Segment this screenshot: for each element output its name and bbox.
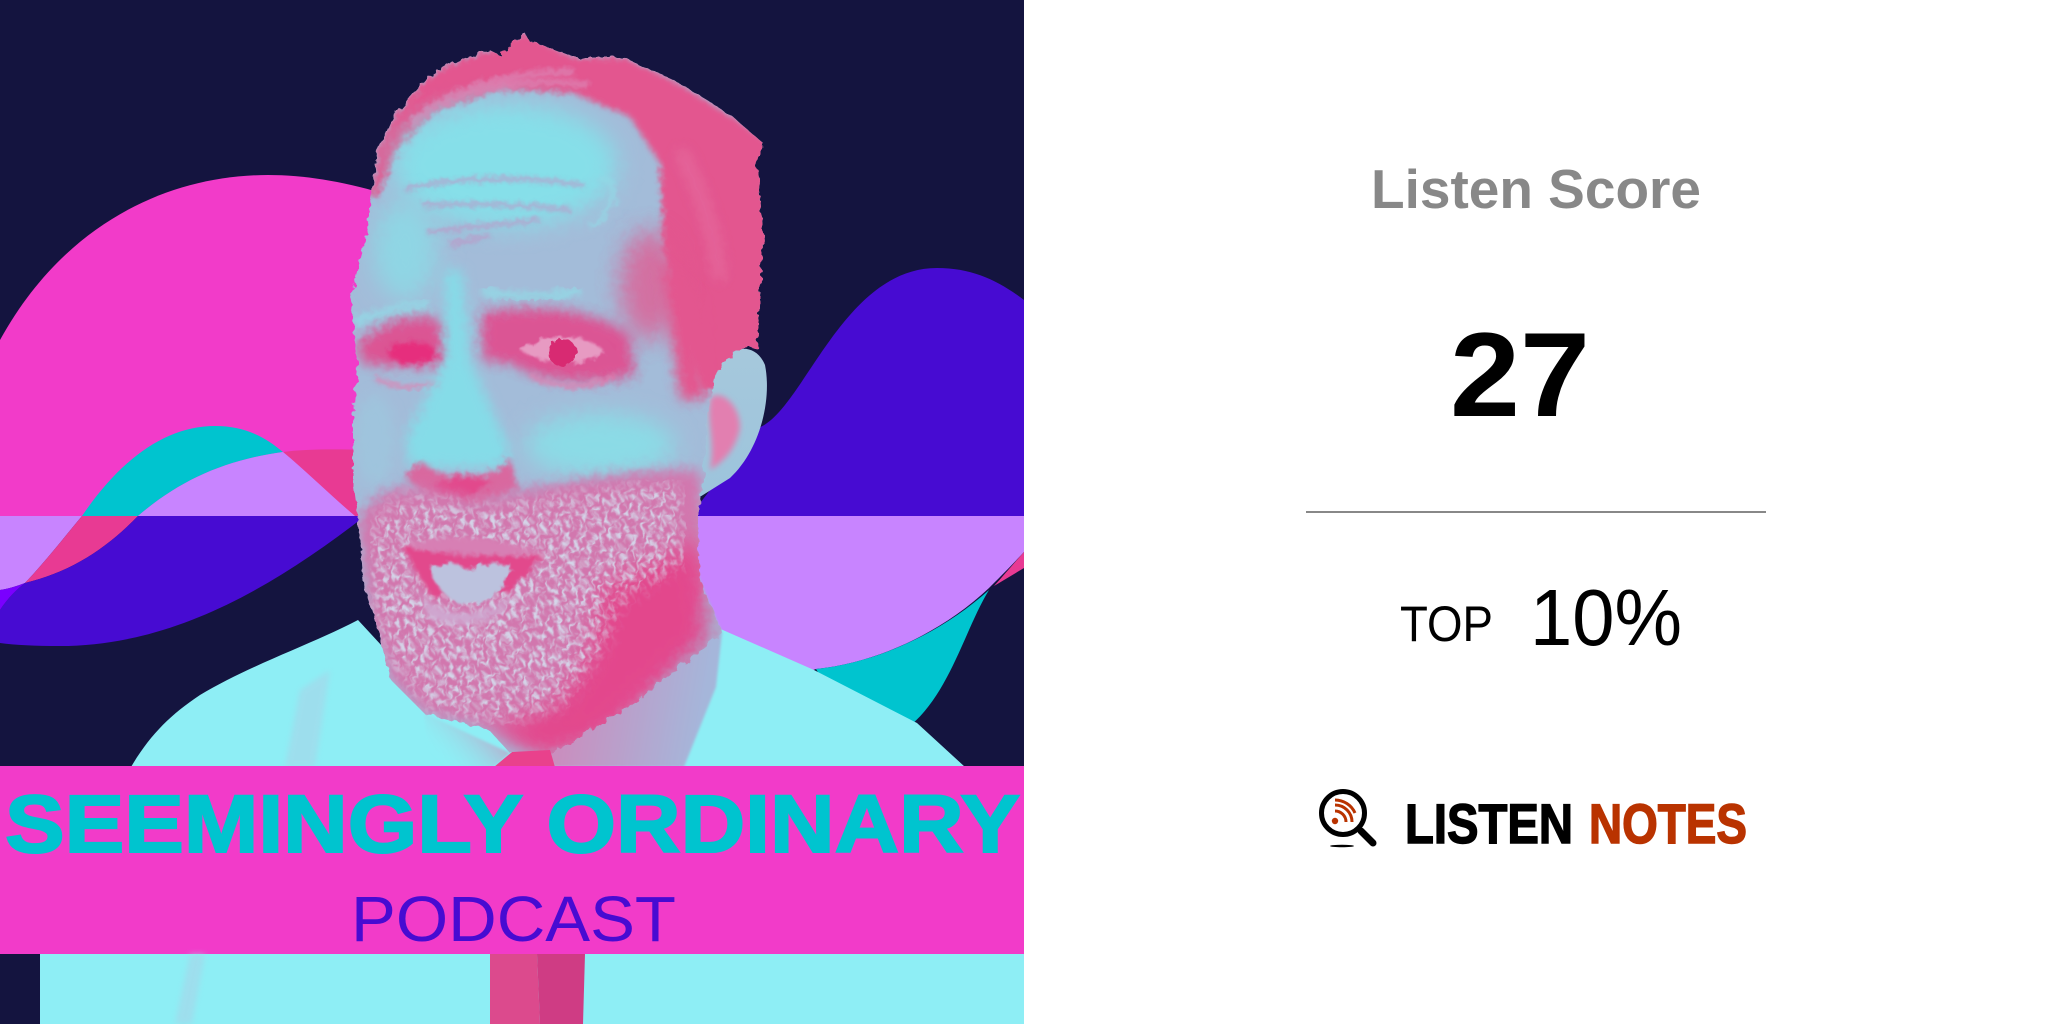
ear [690, 349, 767, 500]
hair [340, 33, 770, 393]
wave: violet sliver [0, 583, 25, 610]
temple shade [620, 230, 680, 340]
title band [0, 766, 1024, 954]
wave: dark purple right [690, 268, 1024, 516]
left eye socket [358, 317, 445, 367]
background [0, 0, 1024, 1024]
person: portrait illustration [40, 30, 1024, 1024]
wave: lilac crest [138, 452, 355, 516]
tie right half [537, 954, 585, 1024]
right eye white [520, 337, 605, 363]
percentile value: 10% [1530, 573, 1682, 662]
jaw shade [489, 540, 710, 756]
right eye socket [482, 308, 635, 382]
shirt right collar [540, 555, 722, 767]
divider [1306, 511, 1766, 513]
label: TOP: TOP [1400, 596, 1493, 652]
score value: 27 [1450, 308, 1590, 442]
score panel [1306, 158, 1766, 855]
forehead left highlight [373, 200, 437, 300]
shirt left collar shade [424, 713, 510, 767]
mouth interior [402, 545, 543, 597]
nose base shade [405, 458, 518, 505]
icon: magnifier with RSS [1322, 792, 1373, 847]
upper lip [404, 537, 540, 556]
wave: pink blob [0, 175, 392, 516]
teeth [430, 562, 512, 604]
shirt shade streak [285, 670, 330, 767]
wave: teal crest [82, 426, 283, 516]
temple to hair bridge [660, 260, 705, 400]
left brow ridge [355, 305, 430, 322]
right eye iris [549, 339, 577, 367]
lower lip [420, 592, 512, 624]
shirt bottom streak [175, 954, 205, 1024]
nose bridge highlight [405, 270, 510, 468]
hair side highlights [680, 150, 720, 280]
hair top highlights [410, 72, 590, 125]
tie [490, 954, 585, 1024]
forehead crease highlight [590, 179, 613, 226]
head [340, 30, 770, 760]
wave: teal right [816, 590, 989, 725]
right brow ridge [482, 290, 580, 298]
logo: Listen Notes [1322, 792, 1747, 855]
head base tone [340, 30, 770, 760]
shirt [40, 580, 1024, 1024]
nostril [432, 476, 490, 498]
subtitle text: PODCAST [351, 883, 676, 955]
beard base [358, 470, 705, 753]
wave: red left [25, 516, 138, 583]
tie knot [494, 750, 555, 767]
forehead highlight [393, 103, 617, 227]
ear inner shade [709, 395, 740, 470]
wave: dark purple left [0, 516, 365, 646]
wordmark: LISTEN: LISTEN [1405, 792, 1573, 855]
wave: red right [994, 552, 1024, 586]
heading: Listen Score: Listen Score [1371, 158, 1701, 220]
under-eye creases [375, 375, 615, 387]
beard grain [370, 480, 685, 725]
left cheek tone [355, 395, 395, 485]
cheek highlight [525, 413, 675, 477]
left eye [388, 342, 436, 364]
wave: red crest [283, 449, 365, 530]
title text: SEEMINGLY ORDINARY [5, 779, 1020, 870]
wave: lilac right [690, 516, 1024, 690]
wordmark: NOTES: NOTES [1589, 792, 1747, 855]
podcast cover artwork [0, 0, 1024, 1024]
wave: lilac left [0, 516, 82, 590]
tie left half [490, 954, 540, 1024]
forehead wrinkles [405, 179, 585, 245]
